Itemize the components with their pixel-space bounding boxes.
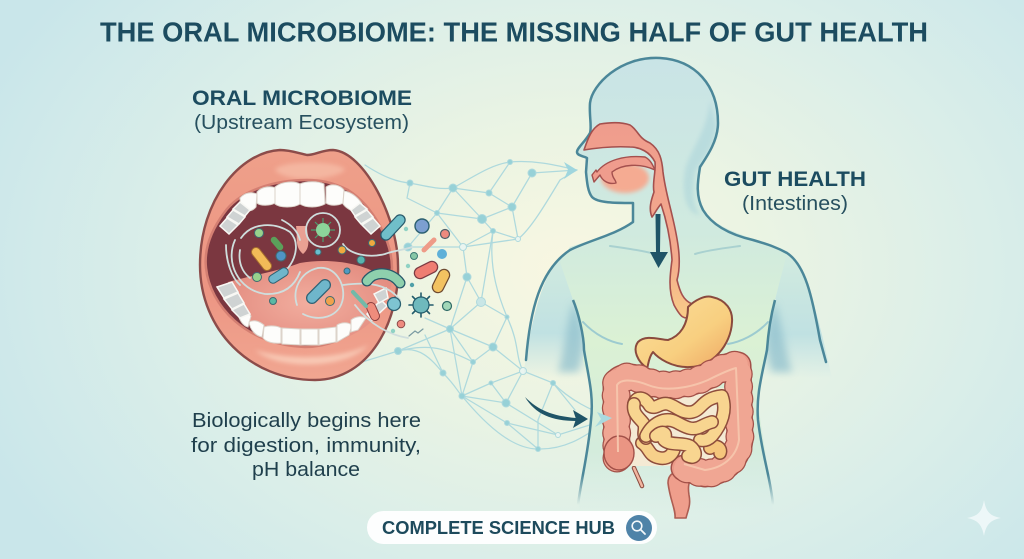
- caption: begins here: [191, 410, 421, 481]
- green round microbe: [442, 302, 452, 310]
- human body silhouette: [523, 58, 832, 515]
- curved arrow into intestine: [525, 397, 588, 428]
- appendix: [634, 468, 642, 486]
- network nodes: [394, 160, 560, 452]
- colon outline: [616, 365, 740, 474]
- cecum: [604, 436, 634, 470]
- network linking mouth to nose and intestine: [362, 160, 612, 452]
- icon: magnifier: [626, 515, 652, 541]
- yellow rod: [438, 275, 444, 287]
- tongue: [228, 261, 392, 345]
- coil: bottom left: [642, 443, 674, 458]
- swirls inside mouth: [226, 213, 412, 338]
- collarbones: [610, 246, 740, 254]
- head and neck shading: [684, 100, 716, 215]
- torso fill: [560, 58, 787, 515]
- salmon round microbe: [440, 230, 450, 238]
- light arrow tip to intestine: [595, 412, 612, 427]
- red rod: [420, 267, 432, 273]
- coil: lower S: [656, 433, 695, 457]
- upper molars: [220, 202, 380, 234]
- caption: begins here: for digestion, immunity,: [191, 435, 421, 457]
- light arrow tip to nose: [564, 162, 577, 179]
- microbes leaving the mouth: [353, 219, 452, 336]
- tiny squiggle: [409, 329, 423, 336]
- rectum: [668, 471, 700, 518]
- nasal cavity, pharynx and esophagus: [584, 123, 694, 318]
- lip highlights: [255, 162, 368, 365]
- green small microbe: [410, 252, 418, 260]
- small red bacterium: [371, 307, 375, 316]
- upper teeth: [240, 182, 363, 212]
- salmon rod: [424, 240, 434, 250]
- label: gut health: GUT HEALTH: [724, 167, 866, 191]
- colon highlight: [617, 368, 739, 470]
- stomach: [636, 297, 732, 368]
- tongue: [592, 157, 655, 183]
- coil: middle wave: [646, 420, 712, 436]
- brand pill: [367, 511, 657, 544]
- coil: bottom right: [710, 446, 720, 453]
- coil: left drop: [634, 404, 646, 438]
- lips: [200, 150, 398, 380]
- label: oral microbiome: ORAL MICROBIOME: [192, 86, 412, 110]
- blue round microbe: [415, 219, 429, 233]
- salmon lower microbe: [397, 320, 405, 328]
- label: gut health: [724, 167, 866, 215]
- torso side lines: [573, 300, 592, 505]
- thin teal bacterium: [353, 292, 366, 306]
- lower molars: [217, 282, 388, 320]
- large intestine: [604, 365, 740, 518]
- title: THE ORAL MICROBIOME: THE MISSING HALF OF GUT HEALTH: [100, 16, 928, 48]
- small intestine: [634, 396, 724, 458]
- mouth opening: [206, 180, 392, 347]
- lower teeth: [237, 310, 366, 345]
- arrow down esophagus: [650, 214, 668, 268]
- mouth cavity in profile: [601, 163, 649, 193]
- caption: begins here: Biologically begins here: [192, 410, 421, 432]
- teal round microbe: [388, 298, 400, 310]
- interior behind small intestine: [626, 388, 730, 466]
- uvula: [296, 226, 308, 254]
- microbes inside mouth: [252, 218, 376, 306]
- coil: top wave: [634, 396, 724, 440]
- brand pill: COMPLETE SCIENCE HUB: [382, 517, 615, 538]
- blue small microbe: [437, 249, 447, 259]
- label: oral microbiome: (Upstream Ecosystem): [194, 112, 409, 134]
- virus particle: [409, 293, 433, 317]
- open mouth illustration: [200, 150, 412, 380]
- icon: sparkle: [967, 500, 1001, 536]
- chest lines: [583, 322, 768, 344]
- bacillus teal: [386, 220, 400, 235]
- label: gut health: (Intestines): [742, 193, 848, 215]
- label: oral microbiome: [192, 86, 412, 134]
- head and shoulders outline: [526, 58, 826, 362]
- floating dots: [391, 227, 414, 333]
- bacillus green: [367, 274, 400, 283]
- arm shading: [523, 250, 832, 378]
- caption: begins here: pH balance: [252, 459, 360, 481]
